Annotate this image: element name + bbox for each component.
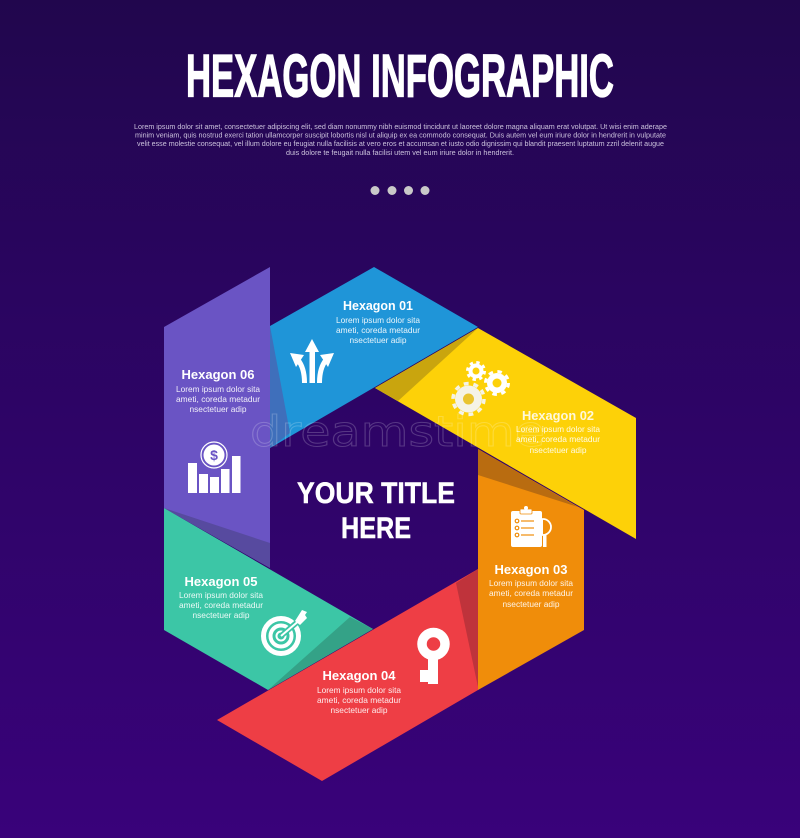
icon: target with arrow: [264, 610, 307, 654]
text: hexagon 04 body: ameti, coreda metadur: [317, 695, 401, 705]
panel: hexagon 05 green: [164, 508, 373, 690]
intro text block: Lorem ipsum dolor sit amet, consectetuer adipiscing elit, sed diam nonummy nibh euismod tincidunt ut laoreet dolore magna aliquam erat volutpat. Ut wisi enim aderape: [134, 122, 667, 131]
text: hexagon 05 body: Lorem ipsum dolor sita: [179, 590, 263, 600]
text: hexagon 06 body: Lorem ipsum dolor sita: [176, 384, 260, 394]
text: hexagon 03 body: [489, 578, 573, 609]
text: hexagon 04 body: Lorem ipsum dolor sita: [317, 685, 401, 695]
panel: hexagon 03 orange: [478, 449, 584, 690]
text: hexagon 01 body: ameti, coreda metadur: [336, 325, 420, 335]
watermark: dreamstime: [250, 407, 545, 456]
icon: gears: [453, 362, 508, 414]
text: hexagon 02 body: Lorem ipsum dolor sita: [516, 424, 600, 434]
intro text block: [134, 122, 667, 157]
heading: hexagon 03: Hexagon 03: [494, 562, 568, 577]
intro text block: velit esse molestie consequat, vel illum dolore eu feugiat nulla facilisis at vero eros et accumsan et iusto odio dignissim qui blandit praesent luptatum zzril delenit augue: [137, 139, 664, 148]
text: hexagon 01 body: [336, 315, 420, 345]
text: hexagon 02 body: [516, 424, 600, 455]
center title: YOUR TITLE: [297, 477, 455, 510]
text: hexagon 03 body: nsectetuer adip: [502, 599, 560, 609]
icon: three way arrows: [290, 339, 334, 383]
text: hexagon 06 body: [176, 384, 260, 414]
text: hexagon 05 body: [179, 590, 263, 620]
icon: key: [420, 632, 445, 684]
panel: hexagon 01 blue: [270, 267, 478, 448]
heading: hexagon 04: Hexagon 04: [322, 668, 396, 683]
text: hexagon 04 body: nsectetuer adip: [330, 705, 388, 715]
text: hexagon 05 body: ameti, coreda metadur: [179, 600, 263, 610]
center title: [297, 477, 455, 545]
panel: hexagon 02 yellow: [375, 328, 636, 539]
panel: hexagon 04 red: [217, 569, 478, 781]
heading: hexagon 06: Hexagon 06: [182, 367, 254, 382]
intro text block: duis dolore te feugait nulla facilisi utem vel eum iriure dolor in hendrerit.: [286, 148, 514, 157]
text: hexagon 02 body: ameti, coreda metadur: [516, 434, 600, 444]
pagination dots: [370, 186, 430, 195]
text: hexagon 05 body: nsectetuer adip: [192, 610, 250, 620]
icon: dollar bar chart: $: [210, 447, 218, 463]
text: hexagon 04 body: [317, 685, 401, 715]
icon: clipboard with magnifier: [511, 506, 551, 547]
text: hexagon 01 body: nsectetuer adip: [350, 335, 407, 345]
text: hexagon 02 body: nsectetuer adip: [530, 445, 587, 455]
heading: hexagon 01: Hexagon 01: [343, 298, 413, 313]
text: hexagon 06 body: nsectetuer adip: [190, 404, 247, 414]
icon: dollar bar chart: [188, 440, 240, 493]
intro text block: minim veniam, quis nostrud exerci tation ullamcorper suscipit lobortis nisl ut aliquip ex ea commodo consequat. Duis autem vel eum iriure dolor in hendrerit in vulputate: [135, 130, 666, 140]
text: hexagon 01 body: Lorem ipsum dolor sita: [336, 315, 420, 325]
text: hexagon 03 body: Lorem ipsum dolor sita: [489, 578, 573, 588]
center title: HERE: [341, 512, 411, 545]
heading: hexagon 02: Hexagon 02: [522, 408, 594, 423]
text: hexagon 03 body: ameti, coreda metadur: [489, 588, 573, 598]
text: hexagon 06 body: ameti, coreda metadur: [176, 394, 260, 404]
heading: hexagon 05: Hexagon 05: [184, 574, 258, 589]
panel: hexagon 06 purple: [164, 267, 270, 568]
